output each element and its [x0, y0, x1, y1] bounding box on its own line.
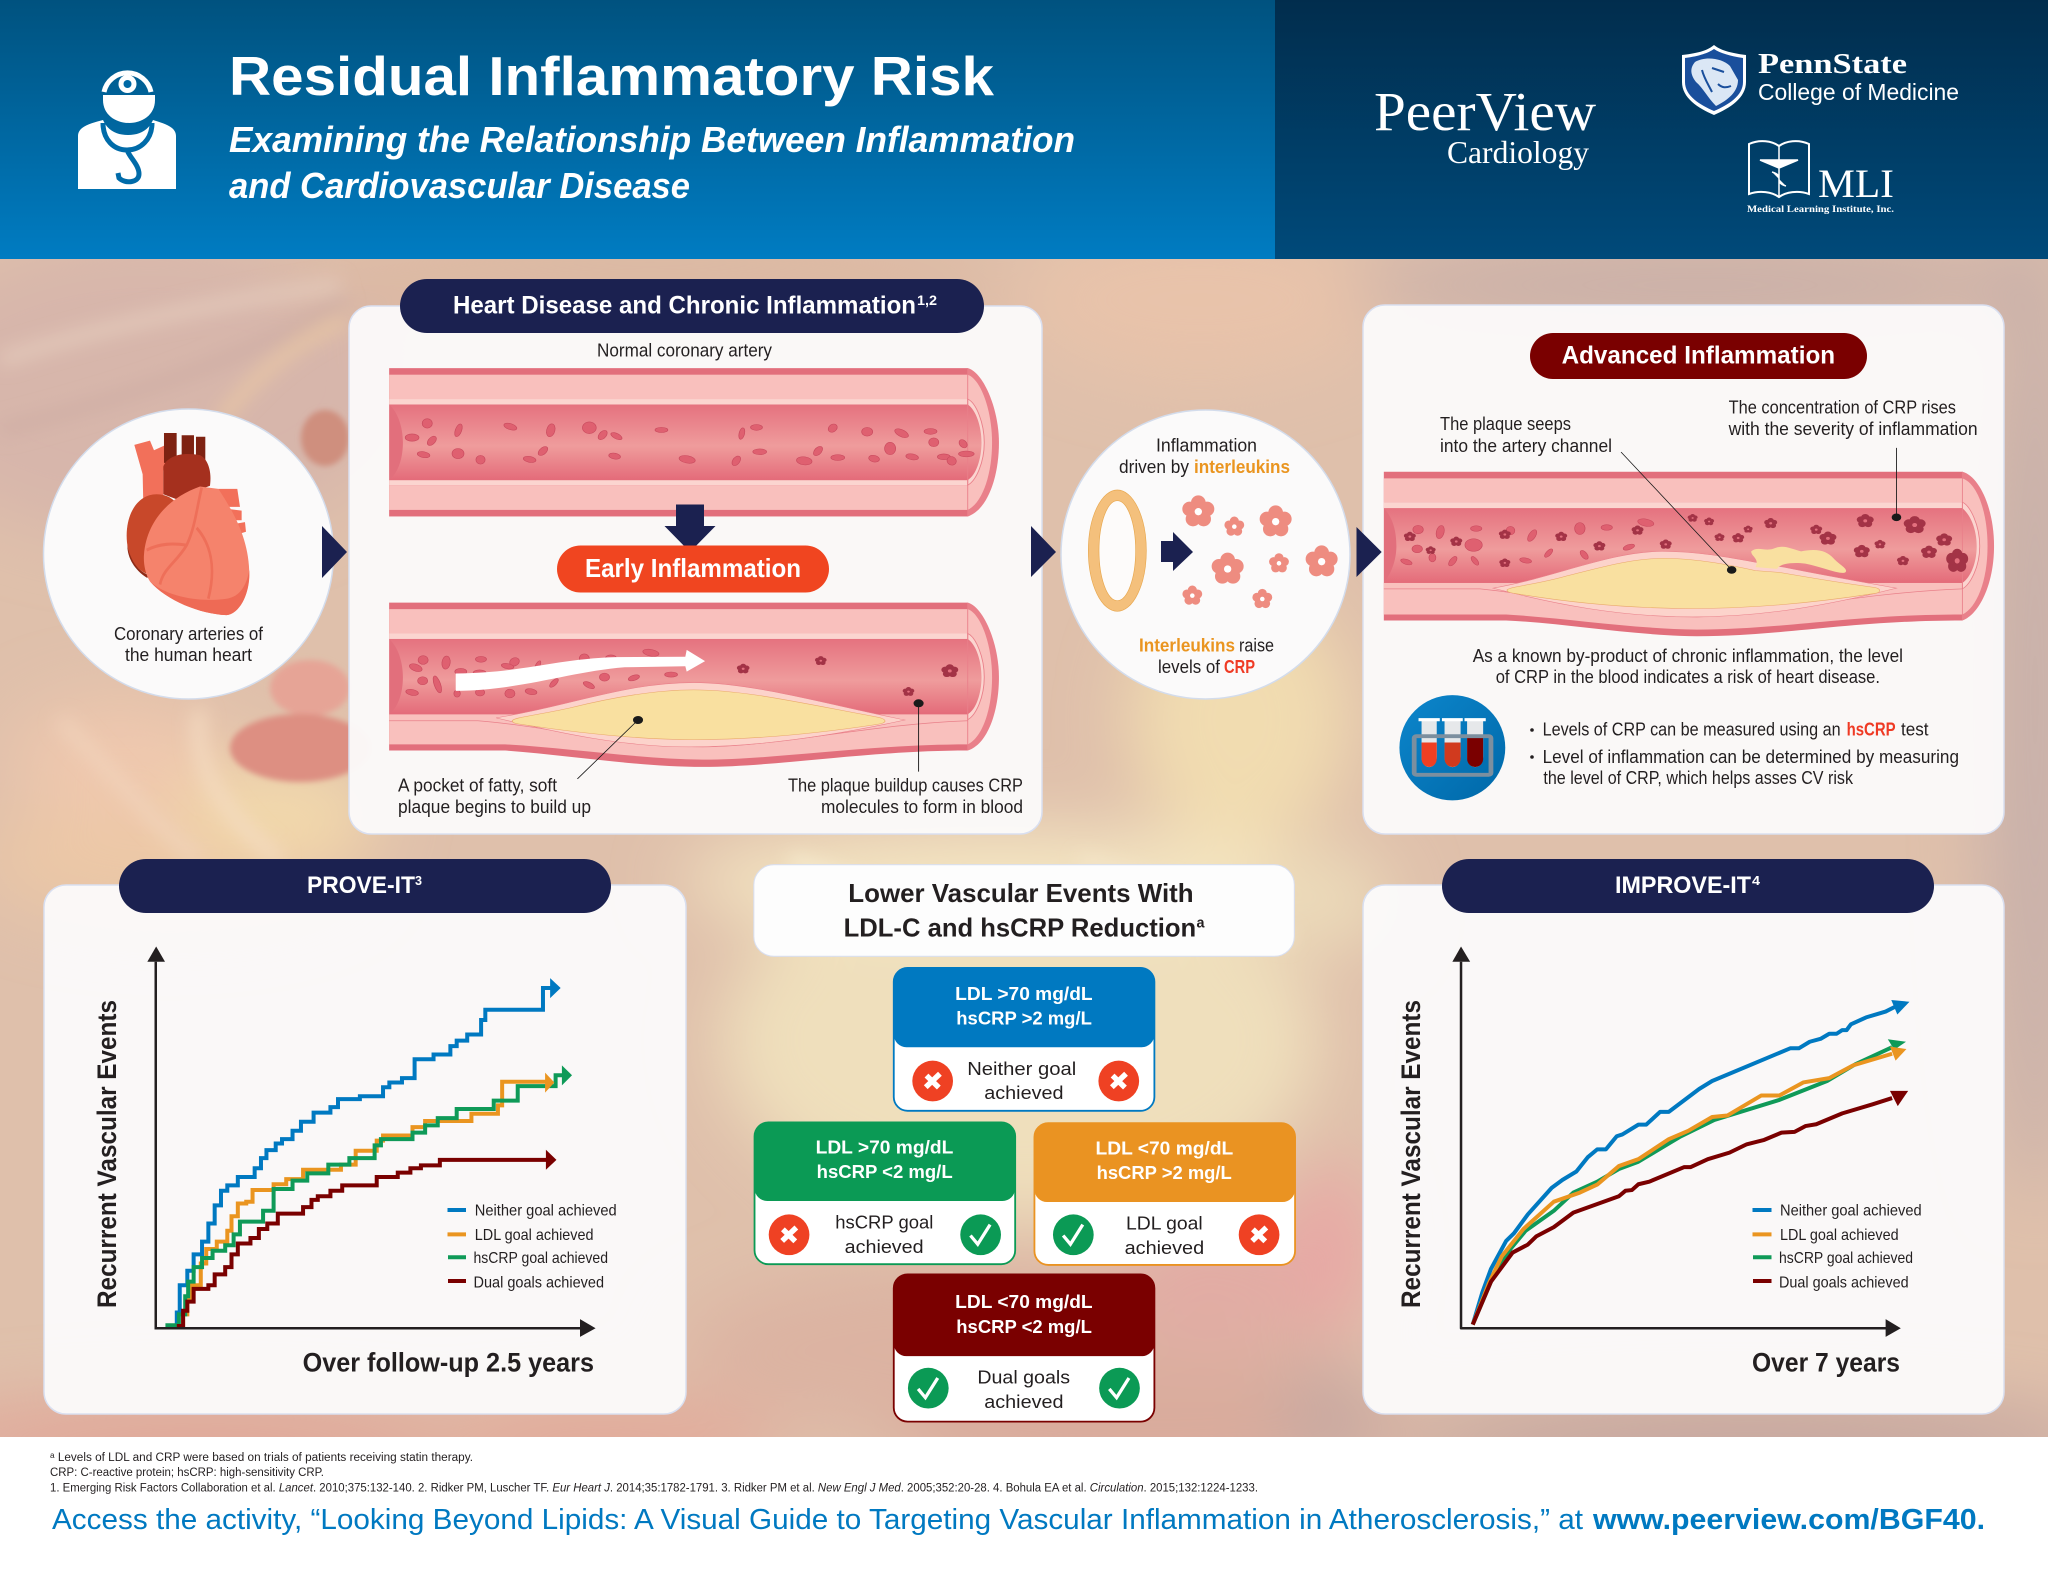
card: neither goal: Neither goal [967, 1059, 1076, 1080]
title: Residual Inflammatory Risk [229, 45, 994, 107]
logo: PeerView Cardiology: Cardiology [1447, 134, 1589, 170]
heading pill: PROVE-IT [119, 859, 611, 913]
card: neither goal: LDL >70 mg/dL [955, 984, 1093, 1004]
card: LDL goal: hsCRP >2 mg/L [1097, 1163, 1232, 1183]
subtitle: Examining the Relationship Between Inflammation [229, 119, 1075, 160]
subtitle [229, 119, 1075, 206]
heading pill [400, 279, 984, 333]
heading pill: IMPROVE-IT: 4 [1752, 873, 1761, 888]
axis label: y: Recurrent Vascular Events [92, 1000, 122, 1308]
footnotes [50, 1451, 1258, 1494]
legend: hsCRP goal achieved [474, 1250, 608, 1267]
icon: interleukin molecules [1182, 495, 1338, 608]
pill: early inflammation: Early Inflammation [585, 553, 801, 583]
pill: advanced inflammation [1530, 333, 1867, 379]
text: CRP bullets: test [1901, 720, 1928, 740]
heading card: a [1197, 916, 1205, 932]
callout: plaque seeps [1440, 414, 1612, 456]
card: LDL goal: LDL goal [1126, 1214, 1203, 1235]
card: dual goals: LDL <70 mg/dL [955, 1292, 1093, 1312]
panel: IMPROVE-IT chart [1363, 859, 2004, 1414]
axis label: x: Over 7 years [1752, 1348, 1900, 1378]
heading pill: IMPROVE-IT [1442, 859, 1934, 913]
legend: Neither goal achieved [475, 1202, 617, 1220]
card: dual goals: achieved [984, 1392, 1064, 1413]
pill: early inflammation [557, 546, 829, 592]
arrow: interleukins to advanced inflammation [1356, 527, 1382, 577]
text: CRP bullets: Level of inflammation can be determined by measuring [1543, 747, 1959, 767]
panel: coronary arteries circle [44, 409, 334, 699]
legend [448, 1202, 617, 1292]
icon: doctor with stethoscope [78, 73, 176, 189]
icon: heart [127, 433, 249, 615]
card: neither goal [894, 968, 1154, 1111]
illustration: normal artery [389, 368, 999, 516]
text: inflammation driven by interleukins: driven by [1119, 457, 1189, 477]
callout: CRP molecules: The plaque buildup causes CRP [788, 776, 1023, 796]
caption: coronary arteries [114, 624, 264, 665]
heading pill: 1,2 [917, 292, 937, 308]
card: dual goals: Dual goals [977, 1367, 1070, 1388]
header band left [0, 0, 1275, 259]
card: dual goals [894, 1274, 1154, 1422]
call to action: Access the activity, “Looking Beyond Lipids: A Visual Guide to Targeting Vascular Inflammation in Atherosclerosis,” at [52, 1504, 1583, 1536]
text: interleukins raise CRP: levels of [1158, 657, 1221, 677]
heading pill: PROVE-IT: 3 [415, 873, 422, 888]
panel: heart disease and chronic inflammation [349, 279, 1042, 834]
logo: PeerView Cardiology [1374, 81, 1596, 170]
panel: interleukins circle [1061, 410, 1350, 699]
text: interleukins raise CRP [1139, 636, 1274, 677]
panel: advanced inflammation [1356, 305, 2004, 834]
legend: LDL goal achieved [1780, 1227, 1899, 1244]
callout: concentration of CRP [1728, 398, 1978, 439]
panel: PROVE-IT chart [44, 859, 686, 1414]
card: LDL goal: achieved [1125, 1238, 1204, 1259]
legend: Dual goals achieved [1779, 1274, 1909, 1292]
callout: plaque seeps: into the artery channel [1440, 436, 1612, 456]
arrow: heart to artery [322, 526, 347, 578]
card: LDL goal: LDL <70 mg/dL [1096, 1138, 1233, 1158]
illustration: early inflammation artery [389, 603, 999, 779]
legend: LDL goal achieved [475, 1227, 594, 1244]
text: CRP bullets: Levels of CRP can be measured using an [1543, 720, 1841, 740]
card: hsCRP goal: hsCRP goal [835, 1213, 933, 1234]
arrow: normal to early inflammation [664, 504, 716, 552]
icon: artery ring [1088, 490, 1146, 611]
callout: fatty plaque [398, 776, 591, 817]
logo: MLI: Medical Learning Institute, Inc. [1747, 205, 1894, 215]
callout: CRP molecules: molecules to form in blood [821, 797, 1023, 817]
arrow: early inflammation to interleukins [1031, 526, 1056, 577]
text: CRP by-product [1473, 646, 1903, 687]
header band right [1275, 0, 2048, 259]
callout: plaque seeps: The plaque seeps [1440, 414, 1571, 434]
footnotes: 1. Emerging Risk Factors Collaboration et al. Lancet. 2010;375:132-140. 2. Ridker PM, Luscher TF. Eur Heart J. 2014;35:1782-1791. 3. Ridker PM et al. New Engl J Med. 2005;352:20-28. 4. Bohula EA et al. Circulation. 2015;132:1224-1233. [50, 1482, 1258, 1494]
text: CRP by-product: As a known by-product of chronic inflammation, the level [1473, 646, 1903, 666]
callout: fatty plaque: A pocket of fatty, soft [398, 776, 557, 796]
footnotes: a [50, 1451, 55, 1460]
logo: MLI [1747, 141, 1894, 215]
line chart: IMPROVE-IT [1452, 947, 1909, 1337]
text: interleukins raise CRP: Interleukins [1139, 636, 1235, 656]
legend: Neither goal achieved [1780, 1202, 1922, 1220]
callout: CRP molecules [788, 776, 1023, 817]
text: inflammation driven by interleukins: Inflammation [1156, 436, 1257, 456]
card: hsCRP goal: achieved [845, 1237, 924, 1258]
caption: coronary arteries: Coronary arteries of [114, 624, 264, 644]
heading card: Lower Vascular Events With [848, 880, 1194, 908]
heading pill: Heart Disease and Chronic Inflammation [453, 292, 916, 320]
call to action: www.peerview.com/BGF40. [1592, 1504, 1985, 1536]
callout: concentration of CRP: The concentration of CRP rises [1729, 398, 1956, 418]
axis label: y: Recurrent Vascular Events [1396, 1000, 1426, 1308]
text: inflammation driven by interleukins [1119, 436, 1290, 477]
icon: blood test tubes [1399, 695, 1505, 800]
callout: concentration of CRP: with the severity of inflammation [1728, 419, 1978, 439]
footnotes: CRP: C-reactive protein; hsCRP: high-sensitivity CRP. [50, 1467, 324, 1479]
card: LDL goal [1034, 1123, 1295, 1265]
subtitle: and Cardiovascular Disease [229, 165, 690, 206]
callout: fatty plaque: plaque begins to build up [398, 797, 591, 817]
logo: Penn State: College of Medicine [1758, 79, 1959, 105]
heading card [754, 865, 1294, 956]
card: hsCRP goal: hsCRP <2 mg/L [817, 1162, 953, 1182]
footnotes: Levels of LDL and CRP were based on trials of patients receiving statin therapy. [55, 1452, 473, 1464]
legend: hsCRP goal achieved [1779, 1250, 1913, 1267]
card: neither goal: hsCRP >2 mg/L [956, 1008, 1092, 1028]
legend [1752, 1202, 1922, 1292]
text: interleukins raise CRP: raise [1239, 636, 1274, 656]
heading card: LDL-C and hsCRP Reduction [844, 914, 1196, 942]
card: neither goal: achieved [984, 1083, 1064, 1104]
text: CRP bullets: hsCRP [1847, 720, 1896, 740]
text: CRP by-product: of CRP in the blood indicates a risk of heart disease. [1496, 667, 1880, 687]
text: CRP bullets [1530, 720, 1959, 788]
card: dual goals: hsCRP <2 mg/L [956, 1317, 1092, 1337]
arrow: ring to cytokines [1161, 532, 1193, 571]
illustration: advanced artery [1384, 448, 1994, 636]
heading pill: PROVE-IT: PROVE-IT [307, 872, 415, 899]
axis label: x: Over follow-up 2.5 years [303, 1348, 594, 1378]
logo: MLI: MLI [1818, 161, 1894, 206]
heading pill: IMPROVE-IT: IMPROVE-IT [1615, 872, 1751, 899]
card: hsCRP goal [755, 1122, 1015, 1264]
logo: Penn State [1682, 45, 1959, 115]
footer band [0, 1437, 2048, 1583]
logo: Penn State: PennState [1758, 48, 1907, 80]
card: hsCRP goal: LDL >70 mg/dL [816, 1138, 953, 1158]
line chart: PROVE-IT [147, 947, 596, 1337]
panel: lower vascular events [754, 865, 1295, 1422]
caption: coronary arteries: the human heart [125, 645, 252, 665]
legend: Dual goals achieved [474, 1274, 604, 1292]
logo: PeerView Cardiology: PeerView [1374, 81, 1596, 142]
label: normal artery: Normal coronary artery [597, 340, 772, 360]
text: CRP bullets: the level of CRP, which helps asses CV risk [1543, 768, 1854, 788]
text: inflammation driven by interleukins: interleukins [1194, 457, 1290, 477]
pill: advanced inflammation: Advanced Inflammation [1562, 342, 1835, 370]
text: interleukins raise CRP: CRP [1224, 657, 1255, 677]
